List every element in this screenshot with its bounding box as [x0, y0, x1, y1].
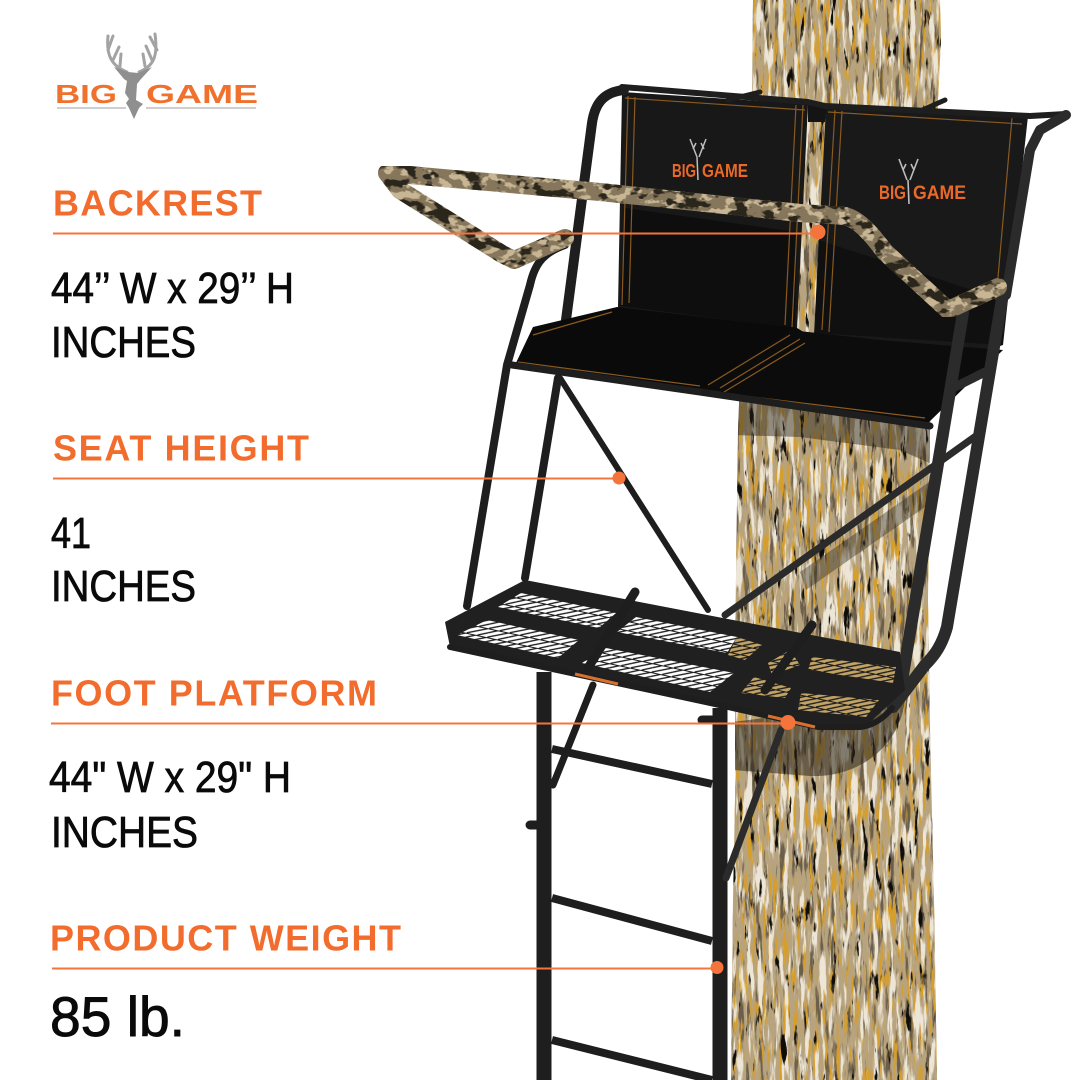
- seat logo left: [672, 139, 748, 181]
- heading: foot platform: FOOT PLATFORM: [51, 672, 377, 714]
- callout dot: product weight: [710, 961, 724, 974]
- logo wordmark GAME: GAME: [146, 79, 258, 109]
- left rear tube: [566, 90, 624, 320]
- backrest right panel: [814, 108, 1028, 370]
- spec: foot platform: [49, 672, 796, 857]
- unit: seat height: INCHES: [51, 562, 196, 611]
- inner left tube: [525, 378, 558, 578]
- seat logo antlers right: [899, 159, 918, 204]
- top frame rail: [622, 87, 1066, 116]
- ladder brace right: [726, 730, 781, 878]
- callout dot: foot platform: [780, 715, 796, 730]
- seat logo GAME left: GAME: [702, 161, 748, 181]
- cross brace: [560, 378, 708, 610]
- foot platform: [445, 580, 905, 727]
- logo deer head: [114, 67, 152, 119]
- callout line: product weight: [52, 968, 717, 970]
- seat stitching: [518, 312, 925, 418]
- spec: backrest: [51, 182, 826, 367]
- center strap: [808, 105, 827, 122]
- platform cross straps: [588, 592, 812, 690]
- value: seat height: 41: [51, 509, 91, 558]
- ladder right rail: [712, 708, 728, 1080]
- right outer tube: [893, 293, 1003, 707]
- heading: seat height: SEAT HEIGHT: [53, 428, 309, 468]
- platform base: [445, 580, 905, 727]
- tree trunk: [725, 0, 945, 1080]
- arm support left: [467, 245, 565, 606]
- logo deer antlers: [108, 34, 157, 72]
- backrest lower shadow right: [815, 240, 1003, 345]
- heading: product weight: PRODUCT WEIGHT: [50, 918, 401, 958]
- platform mesh openings over tree: [728, 637, 896, 717]
- platform label left: [575, 674, 618, 684]
- backrest lower shadow left: [620, 208, 797, 328]
- unit: foot platform: INCHES: [51, 808, 198, 857]
- seat logo BIG left: BIG: [672, 161, 696, 181]
- diagonal brace: [725, 433, 980, 615]
- backrest stitching: [622, 96, 1022, 332]
- callout line: backrest: [53, 232, 818, 234]
- ladder clips: [530, 720, 712, 825]
- seat lower rail: [512, 365, 930, 426]
- seat logo BIG right: BIG: [879, 183, 906, 204]
- seat left: [515, 307, 810, 394]
- callout dot: seat height: [612, 472, 626, 484]
- platform label right: [768, 716, 815, 727]
- ladder left rail: [536, 672, 552, 1080]
- ladder stand illustration: [387, 87, 1066, 1080]
- callout line: foot platform: [51, 722, 788, 724]
- ladder brace left: [553, 685, 593, 785]
- logo underline: [57, 107, 256, 109]
- seat logo GAME right: GAME: [913, 183, 966, 204]
- callout line: seat height: [53, 478, 619, 480]
- callout dot: backrest: [810, 224, 826, 240]
- backrest left panel: [618, 92, 808, 350]
- right inner tube: [900, 313, 963, 693]
- right seat support: [955, 372, 985, 387]
- value: backrest size: 44’’ W x 29’’ H: [51, 264, 294, 313]
- top straps at tree: [728, 92, 945, 112]
- logo wordmark BIG: BIG: [55, 79, 117, 109]
- ladder rungs: [552, 749, 712, 1080]
- seat logo antlers left: [690, 139, 706, 180]
- logo: Big Game: [55, 34, 258, 119]
- seat right: [695, 330, 1003, 424]
- platform front edge: [450, 647, 892, 727]
- platform mesh openings over white: [457, 593, 737, 692]
- value: product weight: 85 lb.: [50, 985, 185, 1048]
- seat logo right: [879, 159, 966, 204]
- unit: backrest: INCHES: [51, 318, 196, 367]
- spec: seat height: [51, 428, 626, 611]
- right backrest end: [1006, 115, 1066, 295]
- value: foot platform size: 44" W x 29" H: [49, 753, 291, 802]
- heading: backrest: BACKREST: [53, 182, 262, 224]
- armrest camo padding: [387, 173, 998, 310]
- spec: product weight: [50, 918, 724, 1048]
